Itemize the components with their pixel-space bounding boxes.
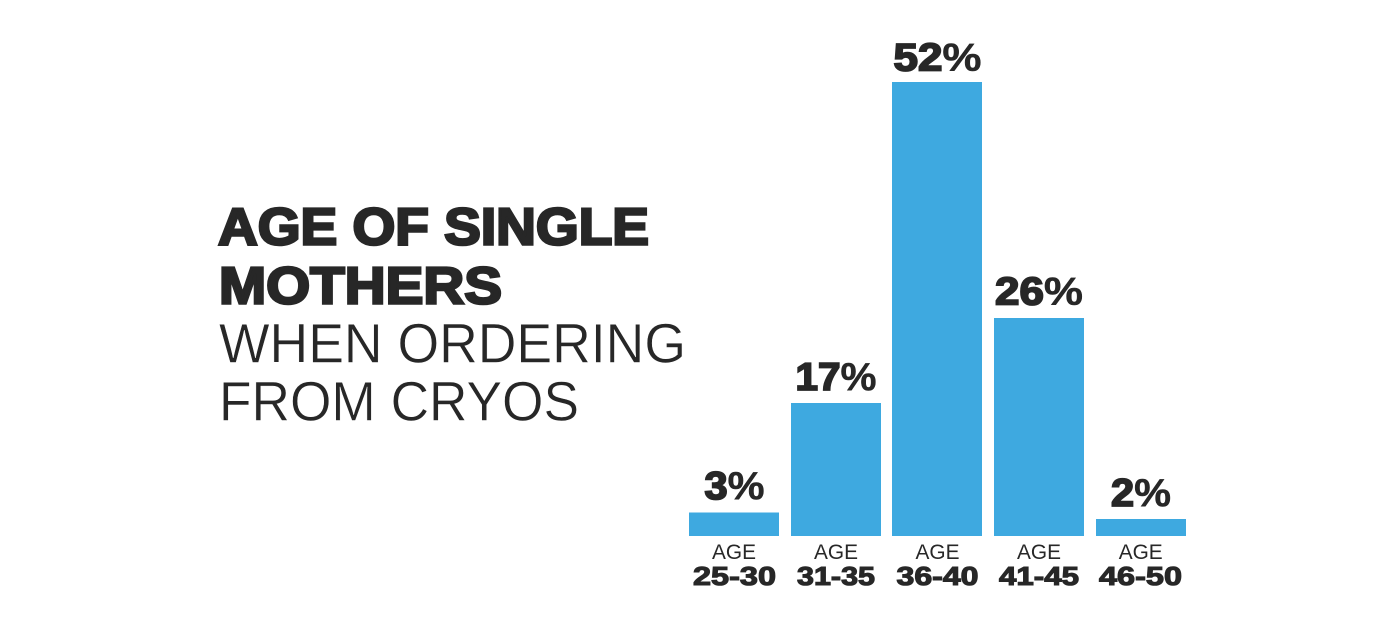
title: MOTHERS — [219, 257, 502, 315]
bar: age 25-30: 3% — [704, 465, 764, 508]
bar: age 36-40: AGE — [916, 540, 960, 564]
bar: age 46-50 — [1096, 472, 1186, 591]
bar: age 41-45 — [994, 270, 1084, 591]
bar: age 31-35: AGE — [814, 540, 858, 564]
title — [218, 198, 686, 432]
bar: age 41-45: 26% — [995, 270, 1083, 314]
bar: age 41-45: 41-45 — [999, 561, 1079, 591]
title: AGE OF SINGLE — [218, 198, 649, 256]
bar: age 41-45: AGE — [1017, 540, 1061, 564]
bar: age 31-35: 31-35 — [797, 561, 875, 591]
title: FROM CRYOS — [219, 370, 579, 432]
bar: age 46-50: 46-50 — [1099, 561, 1182, 591]
title: WHEN ORDERING — [219, 312, 686, 374]
bar: age 36-40: 52% — [894, 36, 982, 80]
bar: age 25-30 — [689, 465, 779, 591]
bar: age 46-50: 2% — [1111, 472, 1171, 515]
bar: age 25-30: AGE — [712, 540, 756, 564]
bar: age 36-40 — [892, 36, 982, 591]
bar: age 46-50: AGE — [1119, 540, 1163, 564]
bar: age 25-30: 25-30 — [693, 561, 776, 591]
bar: age 31-35: 17% — [796, 356, 876, 399]
bar: age 31-35 — [791, 356, 881, 591]
bar chart — [689, 36, 1186, 591]
bar: age 36-40: 36-40 — [896, 561, 978, 591]
